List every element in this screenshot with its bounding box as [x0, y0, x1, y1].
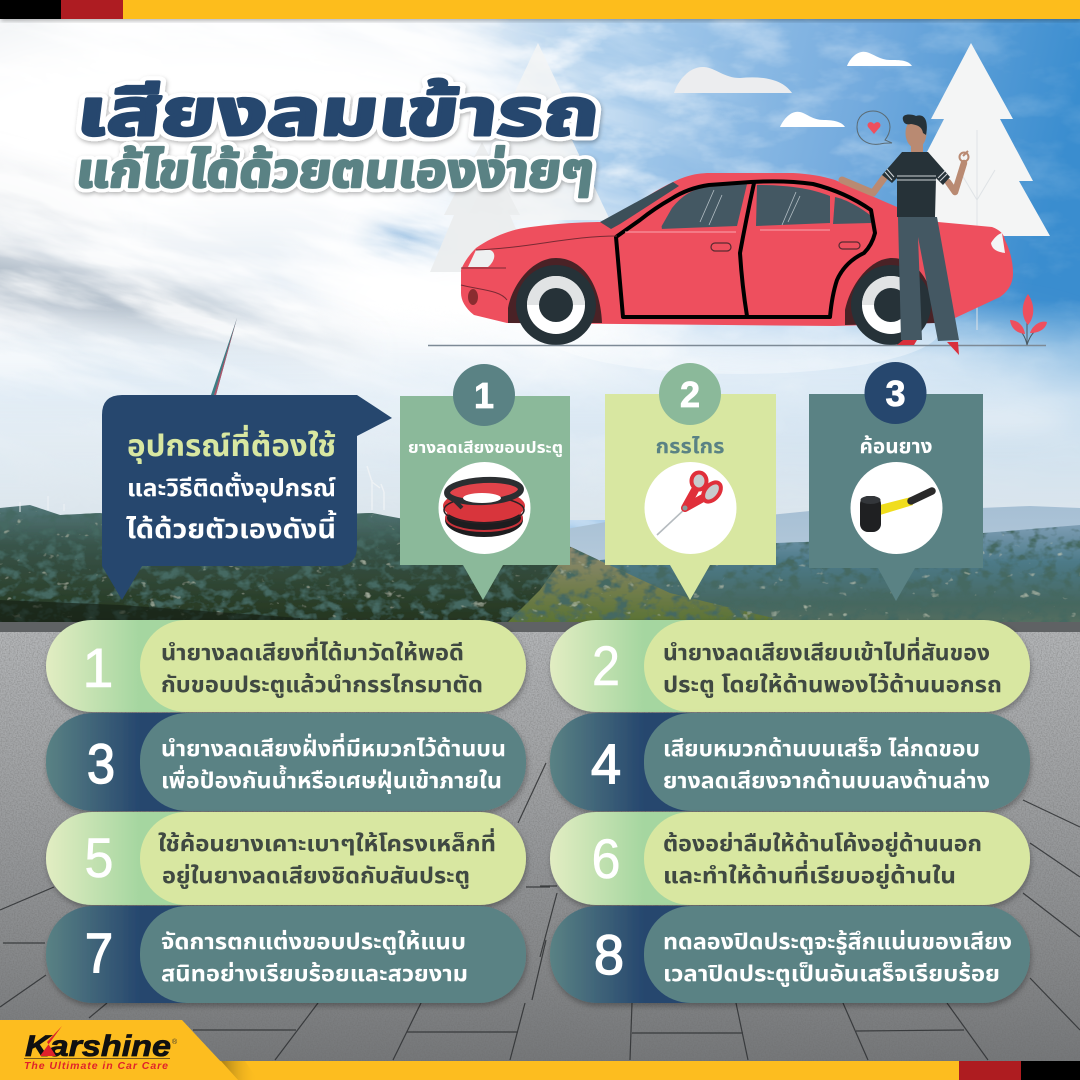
icon: scissors	[644, 462, 736, 554]
step 6: และทำให้ด้านที่เรียบอยู่ด้านใน	[663, 860, 956, 889]
step 6	[550, 812, 1030, 905]
badge 2: 2	[680, 374, 700, 415]
step 8: ทดลองปิดประตูจะรู้สึกแน่นของเสียง	[663, 929, 1012, 955]
step 3: เพื่อป้องกันน้ำหรือเศษฝุ่นเข้าภายใน	[161, 765, 502, 794]
step 1: กับขอบประตูแล้วนำกรรไกรมาตัด	[161, 672, 483, 698]
decorative background trees	[430, 43, 1050, 330]
label: scissors: กรรไกร	[656, 436, 724, 458]
step 7: สนิทอย่างเรียบร้อยและสวยงาม	[161, 961, 468, 986]
step 2: ประตู โดยให้ด้านพองไว้ด้านนอกรถ	[663, 672, 1002, 698]
title: แก้ไขได้ด้วยตนเองง่ายๆ	[74, 144, 597, 198]
icon: rubber mallet	[850, 462, 942, 554]
icon: red plant	[1010, 294, 1047, 345]
icon: rubber seal roll	[438, 462, 530, 554]
top colour bar	[0, 0, 1080, 19]
step 8	[550, 906, 1030, 1003]
callout: tools needed: และวิธีติดตั้งอุปกรณ์	[127, 472, 336, 503]
step 4: ยางลดเสียงจากด้านบนลงด้านล่าง	[663, 768, 990, 793]
step 6: 6	[592, 827, 620, 890]
badge 2	[659, 363, 721, 425]
logo: Karshine: Karshine	[25, 1030, 171, 1063]
step 4	[550, 713, 1030, 811]
panel: tool 1 door seal	[400, 364, 570, 600]
step 7: 7	[85, 921, 113, 984]
panel: tool 2 scissors	[605, 363, 776, 600]
badge 3: 3	[885, 373, 906, 414]
callout: tools needed	[102, 395, 392, 600]
bottom colour bar	[0, 1061, 1080, 1080]
step 7	[46, 906, 526, 1003]
step 6: ต้องอย่าลืมให้ด้านโค้งอยู่ด้านนอก	[663, 831, 982, 857]
step 5: 5	[84, 826, 114, 889]
panel: tool 3 rubber mallet	[809, 362, 983, 601]
label: mallet: ค้อนยาง	[860, 436, 932, 458]
step 5: อยู่ในยางลดเสียงชิดกับสันประตู	[162, 863, 470, 889]
step 2: 2	[592, 634, 620, 697]
step 4: เสียบหมวกด้านบนเสร็จ ไล่กดขอบ	[663, 736, 980, 761]
logo: Karshine: The Ultimate in Car Care	[24, 1060, 168, 1072]
step 8: เวลาปิดประตูเป็นอันเสร็จเรียบร้อย	[663, 961, 1000, 987]
icon: speech bubble with heart	[857, 111, 892, 144]
step 3: นำยางลดเสียงฝั่งที่มีหมวกไว้ด้านบน	[161, 733, 506, 761]
badge 1: 1	[474, 375, 494, 416]
step 7: จัดการตกแต่งขอบประตูให้แนบ	[161, 929, 466, 955]
step 2: นำยางลดเสียงเสียบเข้าไปที่สันของ	[663, 637, 990, 665]
callout: tools needed: ได้ด้วยตัวเองดังนี้	[126, 510, 337, 544]
title: เสียงลมเข้ารถ	[73, 76, 604, 150]
step 5	[46, 812, 526, 905]
title	[73, 76, 604, 198]
title: เสียงลมเข้ารถ	[73, 76, 604, 150]
title: แก้ไขได้ด้วยตนเองง่ายๆ	[74, 144, 597, 198]
step 5: ใช้ค้อนยางเคาะเบาๆให้โครงเหล็กที่	[158, 828, 496, 856]
background: wind turbines	[20, 318, 384, 512]
background: pavement	[0, 622, 1080, 1080]
illustration: red car	[461, 173, 1013, 345]
step 8: 8	[594, 923, 624, 986]
label: door seal: ยางลดเสียงขอบประตู	[408, 440, 563, 458]
logo: Karshine	[0, 1020, 238, 1080]
background: sky and clouds	[0, 0, 1080, 735]
step 3	[46, 713, 526, 811]
badge 1	[453, 364, 515, 426]
callout: tools needed: อุปกรณ์ที่ต้องใช้	[127, 424, 336, 464]
step 2	[550, 620, 1030, 712]
pale ground glow	[540, 286, 940, 374]
step 1: นำยางลดเสียงที่ได้มาวัดให้พอดี	[161, 637, 464, 665]
step 1: 1	[82, 636, 114, 699]
logo: Karshine: ®	[172, 1038, 178, 1046]
illustration: standing man	[842, 115, 968, 355]
ground line	[428, 344, 1046, 346]
white clouds	[674, 52, 912, 127]
step 3: 3	[87, 732, 115, 795]
step 1	[46, 620, 526, 712]
step 4: 4	[591, 732, 621, 795]
background: distant mountains and forest	[0, 505, 1080, 640]
badge 3	[864, 362, 926, 424]
